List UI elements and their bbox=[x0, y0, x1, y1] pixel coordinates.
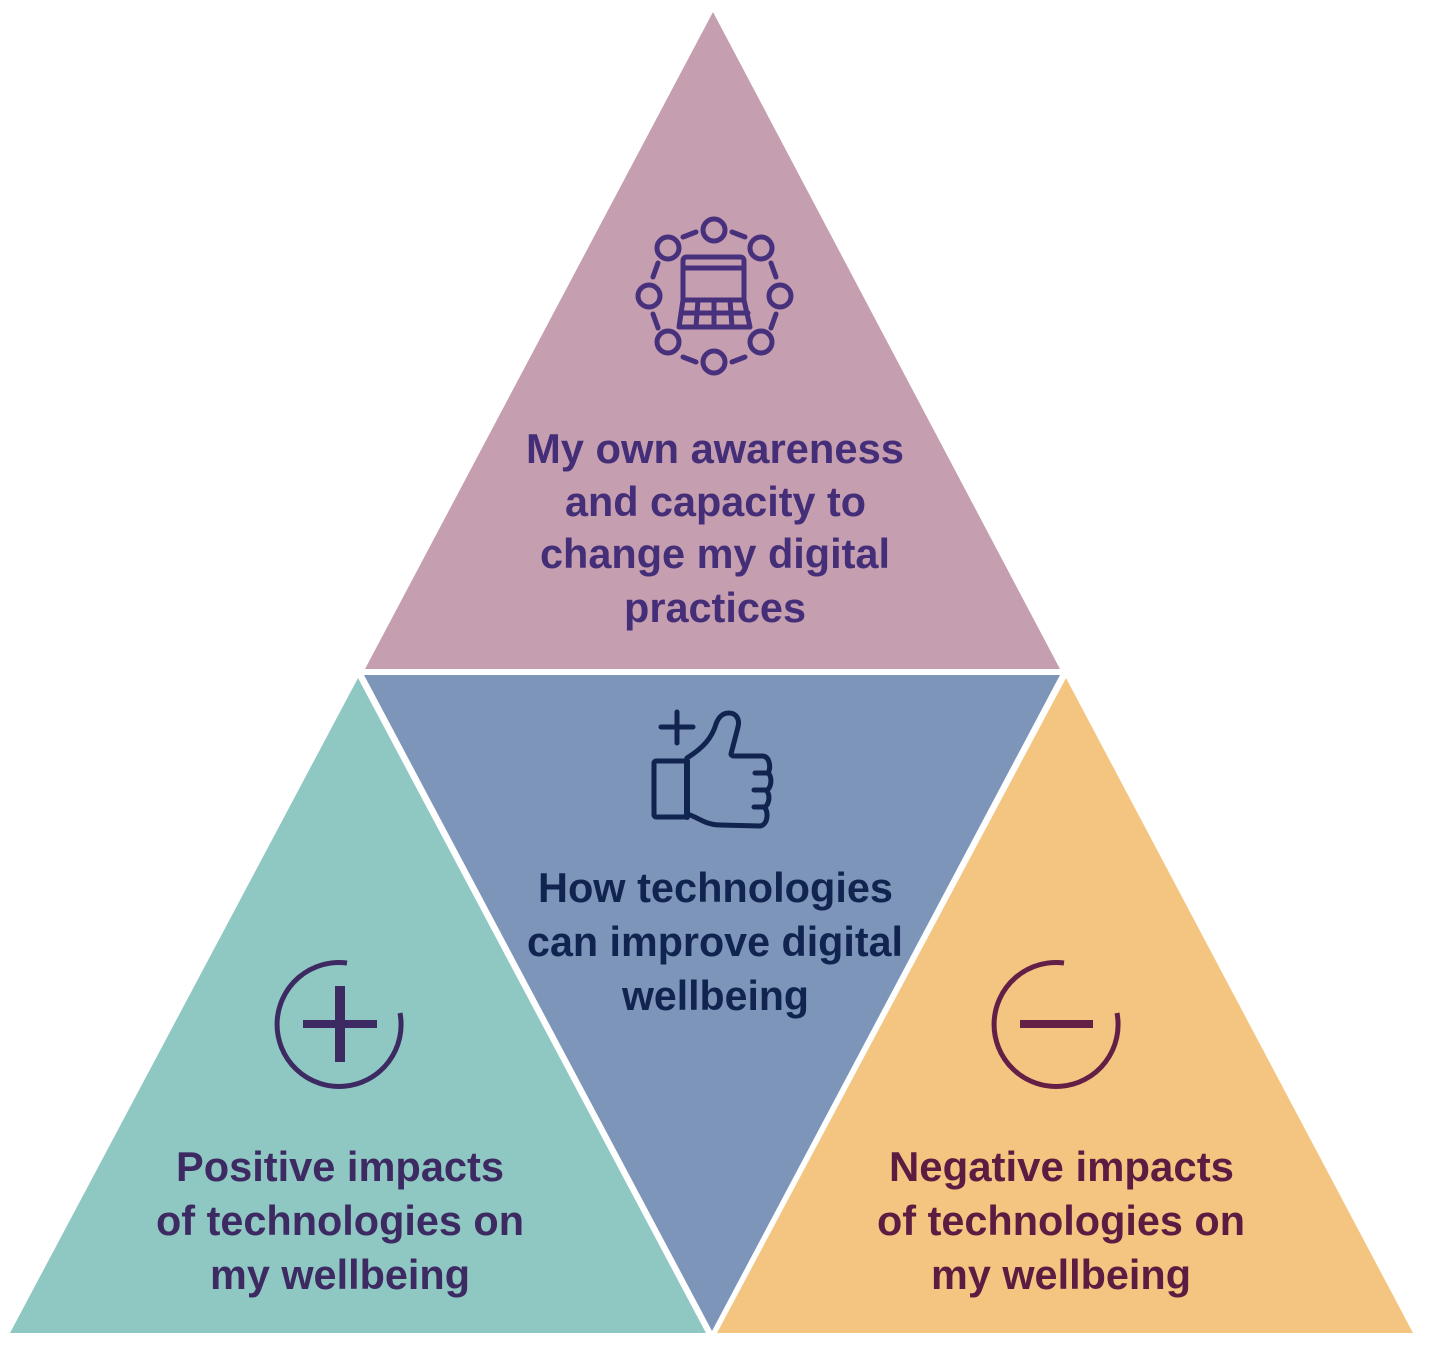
heading: awareness text: and capacity to bbox=[565, 478, 866, 525]
panel: negative impacts (right triangle) bbox=[717, 678, 1413, 1333]
heading: improve wellbeing text: How technologies bbox=[538, 864, 893, 911]
heading: positive impacts text: my wellbeing bbox=[210, 1251, 470, 1298]
heading: awareness text: My own awareness bbox=[526, 425, 904, 472]
heading: awareness text: change my digital bbox=[540, 530, 890, 577]
heading: awareness text: practices bbox=[624, 584, 806, 631]
heading: positive impacts text: Positive impacts bbox=[176, 1143, 504, 1190]
panel: awareness and capacity (top triangle) bbox=[365, 12, 1060, 669]
icon: minus in open circle bbox=[994, 962, 1118, 1086]
heading: awareness text bbox=[526, 425, 904, 631]
panel: how technologies can improve (centre inverted triangle) bbox=[364, 675, 1060, 1331]
heading: negative impacts text: Negative impacts bbox=[889, 1143, 1234, 1190]
icon: plus in open circle bbox=[277, 962, 401, 1086]
heading: improve wellbeing text: wellbeing bbox=[621, 972, 809, 1019]
heading: positive impacts text: of technologies on bbox=[156, 1197, 524, 1244]
heading: negative impacts text: my wellbeing bbox=[931, 1251, 1191, 1298]
panel: positive impacts (left triangle) bbox=[10, 678, 706, 1333]
heading: negative impacts text: of technologies on bbox=[877, 1197, 1245, 1244]
icon: thumbs up with plus bbox=[654, 712, 771, 826]
heading: improve wellbeing text: can improve digital bbox=[527, 918, 903, 965]
heading: improve wellbeing text bbox=[527, 864, 903, 1019]
heading: positive impacts text bbox=[156, 1143, 524, 1298]
icon: laptop in a ring of nodes bbox=[638, 219, 791, 373]
heading: negative impacts text bbox=[877, 1143, 1245, 1298]
